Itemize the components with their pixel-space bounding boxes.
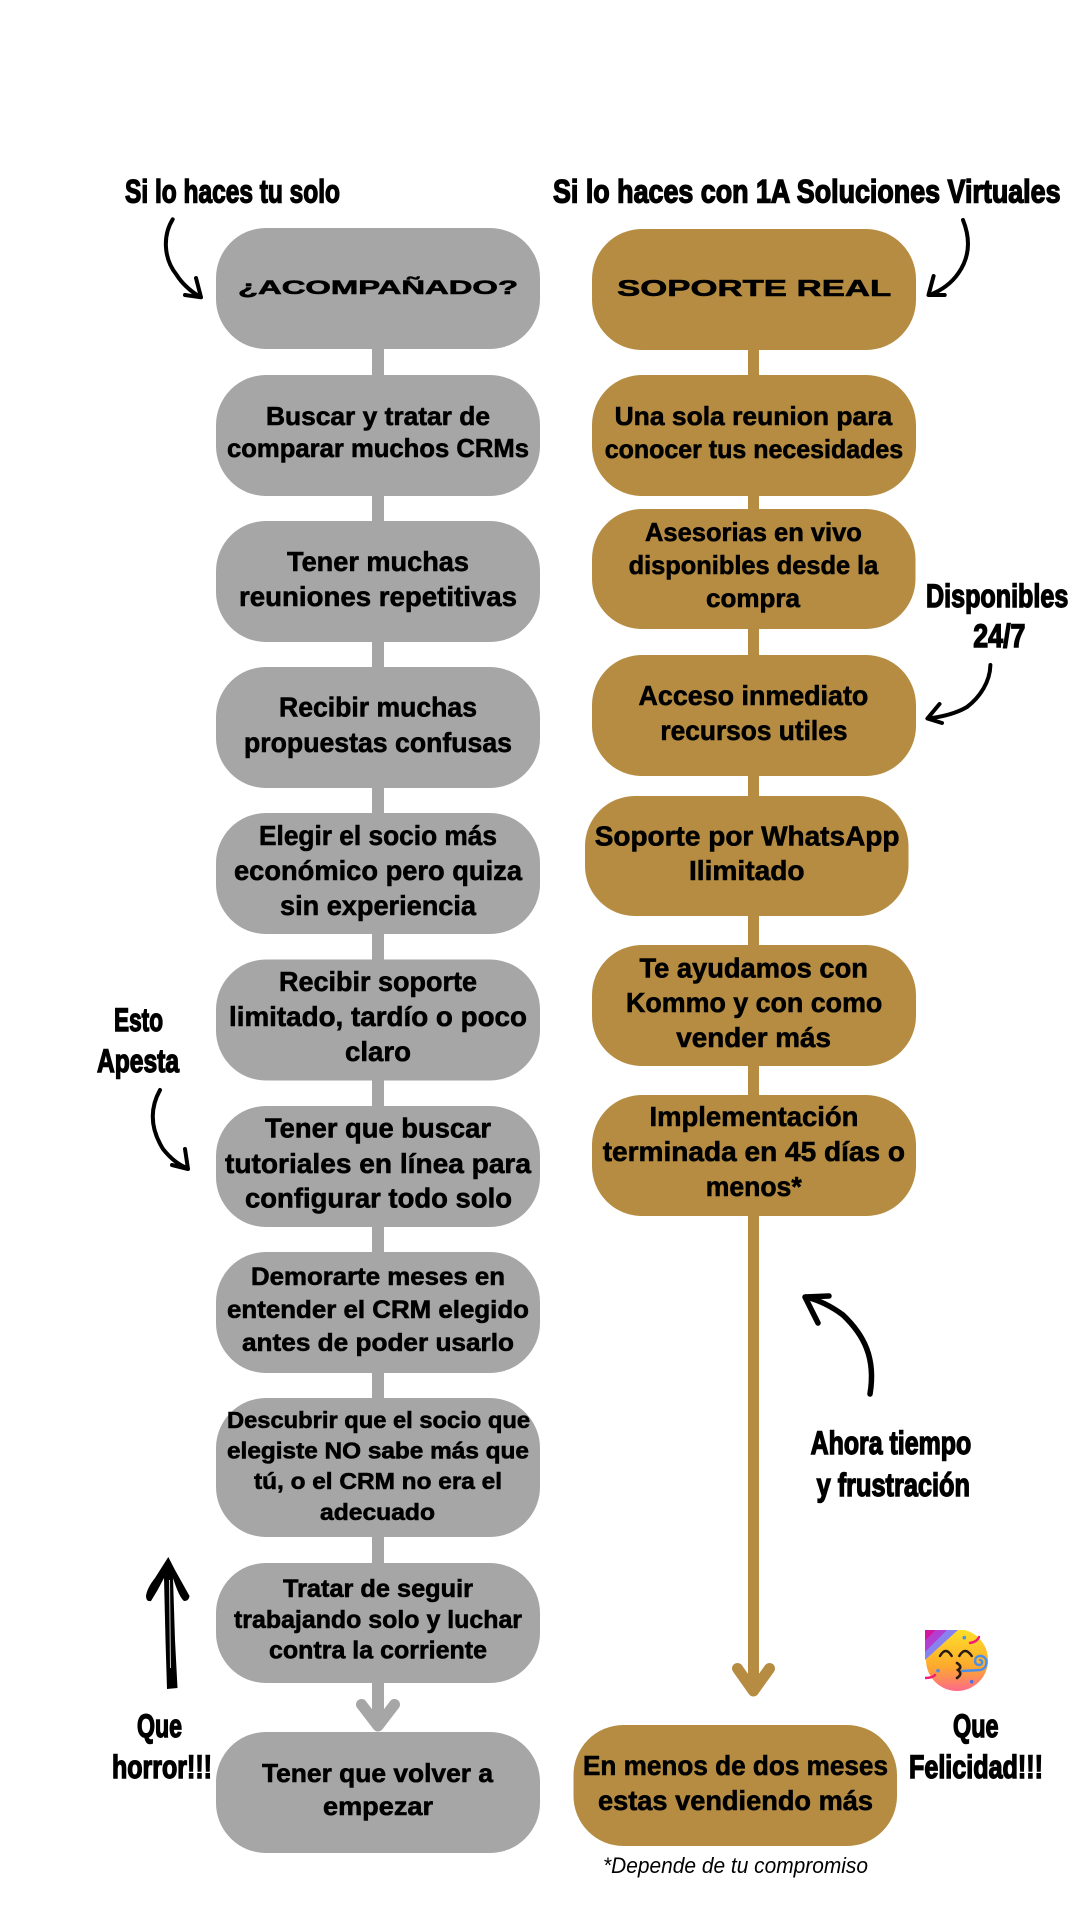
callout: que horror: [112, 1708, 212, 1785]
callout: esto apesta: [97, 1002, 179, 1079]
arrowhead: right column: [738, 1668, 770, 1691]
panel: left step 9: Descubrir que el socio que: [227, 1407, 530, 1433]
panel: left step 4: [216, 667, 540, 788]
panel: left step 9: adecuado: [320, 1499, 435, 1525]
panel: left step 4: Recibir muchas: [279, 692, 477, 722]
panel: right step 6: Te ayudamos con: [640, 952, 868, 984]
panel: right step 4: [592, 655, 916, 776]
panel: left step 11: Tener que volver a: [262, 1758, 494, 1788]
callout: que felicidad: [909, 1708, 1043, 1785]
callout: que felicidad: Felicidad!!!: [909, 1749, 1043, 1785]
panel: right step 6: [592, 945, 916, 1066]
panel: left step 6: [216, 960, 540, 1080]
footnote: *Depende de tu compromiso: [603, 1853, 868, 1878]
panel: left step 9: elegiste NO sabe más que: [227, 1438, 529, 1464]
panel: left step 8: [216, 1252, 540, 1373]
panel: right step 2: [592, 375, 916, 496]
icon: party face emoji: [925, 1629, 988, 1691]
panel: left step 5: [216, 813, 540, 934]
panel: right step 3: compra: [706, 583, 801, 613]
panel: left step 8: entender el CRM elegido: [227, 1296, 529, 1324]
panel: right step 6: Kommo y con como: [626, 987, 882, 1018]
panel: left step 7: tutoriales en línea para: [225, 1148, 531, 1179]
callout: ahorra tiempo: Ahora tiempo: [811, 1425, 971, 1461]
panel: left step 11: empezar: [323, 1791, 433, 1821]
panel: right step 7: [592, 1095, 916, 1216]
icon: arrow to left header pill: [166, 219, 201, 297]
panel: left step 2: [216, 375, 540, 496]
panel: right step 7: menos*: [706, 1171, 802, 1202]
panel: right step 6: vender más: [676, 1022, 831, 1053]
icon: arrow from esto apesta: [153, 1090, 188, 1169]
panel: left step 3: Tener muchas: [287, 546, 469, 577]
panel: left step 1: ¿ACOMPAÑADO?: [238, 276, 518, 299]
callout: que horror: Que: [137, 1708, 182, 1744]
panel: right step 5: Ilimitado: [689, 855, 805, 886]
panel: right final step: estas vendiendo más: [598, 1785, 873, 1816]
panel: left step 10: Tratar de seguir: [283, 1575, 473, 1603]
panel: right step 4: recursos utiles: [660, 715, 848, 746]
panel: left step 2: Buscar y tratar de: [266, 401, 490, 431]
panel: left step 9: tú, o el CRM no era el: [254, 1468, 502, 1494]
connector line: right column: [748, 340, 759, 1692]
panel: right step 7: Implementación: [650, 1101, 858, 1132]
panel: left step 6: Recibir soporte: [279, 966, 477, 997]
panel: left step 5: Elegir el socio más: [259, 820, 497, 851]
callout: esto apesta: Apesta: [97, 1043, 179, 1079]
icon: curved arrow to timeline: [805, 1296, 872, 1394]
panel: left step 5: sin experiencia: [280, 890, 476, 921]
callout: que felicidad: Que: [953, 1708, 998, 1744]
panel: left step 8: Demorarte meses en: [251, 1263, 505, 1291]
panel: right step 3: [592, 509, 916, 629]
panel: left step 9: [216, 1398, 540, 1537]
panel: left step 11: [216, 1732, 540, 1853]
panel: left step 1: [216, 228, 540, 349]
panel: left step 2: comparar muchos CRMs: [227, 433, 529, 463]
icon: hand-drawn up arrow: [146, 1557, 190, 1689]
icon: arrow to right header pill: [928, 220, 968, 295]
panel: left step 10: [216, 1563, 540, 1683]
panel: left step 8: antes de poder usarlo: [242, 1329, 514, 1357]
panel: right step 2: Una sola reunion para: [615, 401, 893, 431]
callout: que horror: horror!!!: [112, 1749, 212, 1785]
callout: disponibles 24/7: [926, 578, 1068, 654]
panel: right step 3: disponibles desde la: [629, 550, 879, 580]
panel: left step 3: reuniones repetitivas: [239, 581, 517, 612]
panel: right step 2: conocer tus necesidades: [605, 434, 903, 464]
panel: left step 7: Tener que buscar: [265, 1112, 491, 1144]
panel: left step 6: claro: [345, 1036, 411, 1067]
panel: right step 5: [585, 796, 908, 916]
heading: left column: Si lo haces tu solo: [125, 174, 340, 210]
panel: left step 5: económico pero quiza: [234, 855, 522, 886]
panel: right step 7: terminada en 45 días o: [603, 1136, 905, 1167]
callout: ahorra tiempo: y frustración: [817, 1467, 970, 1503]
callout: esto apesta: Esto: [114, 1002, 163, 1038]
panel: right step 3: Asesorias en vivo: [645, 517, 862, 547]
panel: left step 10: trabajando solo y luchar: [234, 1606, 522, 1634]
panel: left step 3: [216, 521, 540, 642]
panel: left step 4: propuestas confusas: [244, 727, 512, 758]
panel: right step 4: Acceso inmediato: [638, 680, 868, 711]
connector line: left column: [372, 340, 384, 1726]
panel: left step 7: configurar todo solo: [245, 1182, 512, 1214]
callout: disponibles 24/7: 24/7: [973, 618, 1025, 654]
icon: arrow from disponibles: [927, 665, 990, 723]
panel: right step 5: Soporte por WhatsApp: [595, 820, 900, 852]
panel: left step 7: [216, 1106, 540, 1227]
panel: right final step: [574, 1725, 897, 1846]
arrowhead: left column: [362, 1704, 394, 1726]
panel: right step 1: [592, 229, 916, 350]
panel: left step 10: contra la corriente: [269, 1637, 487, 1665]
panel: left step 6: limitado, tardío o poco: [229, 1001, 527, 1032]
panel: right step 1: SOPORTE REAL: [617, 275, 891, 301]
callout: ahorra tiempo: [811, 1425, 971, 1503]
panel: right final step: En menos de dos meses: [583, 1750, 888, 1781]
